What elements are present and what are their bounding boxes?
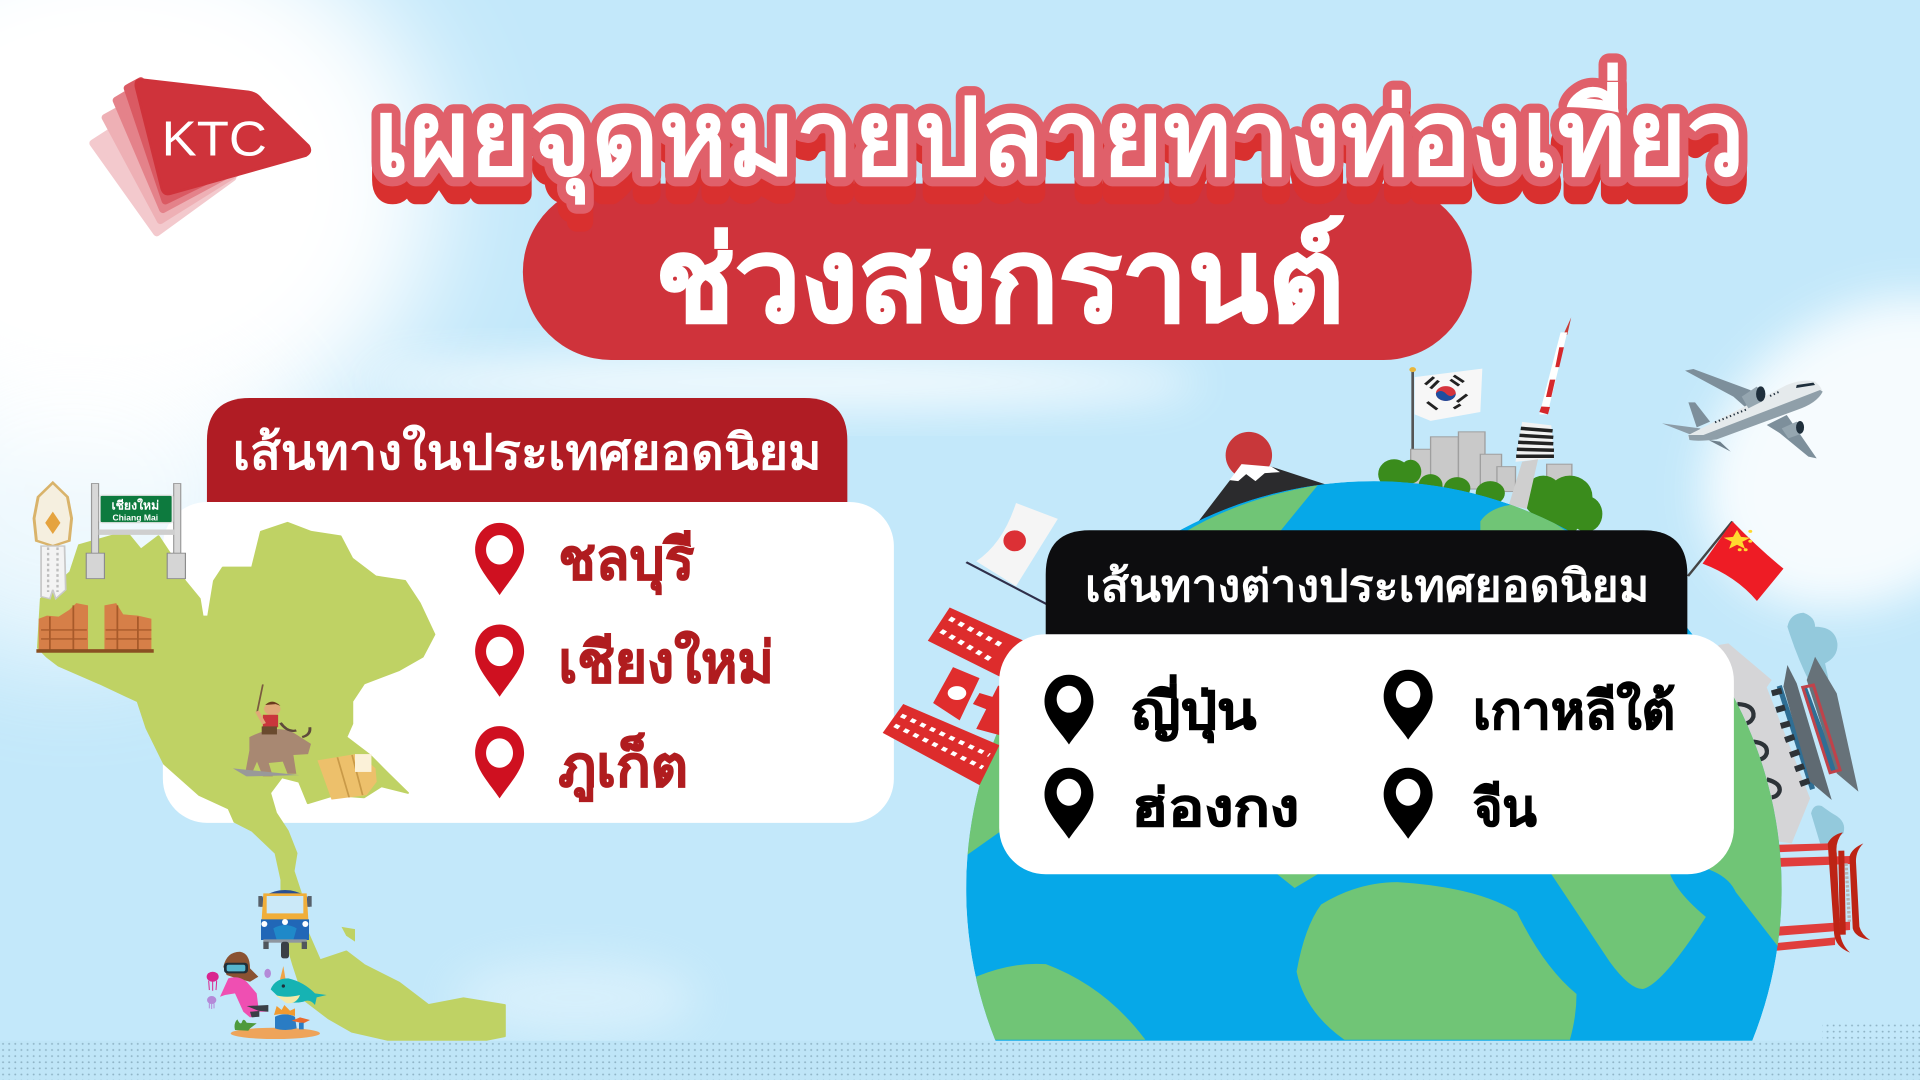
icon: clouds (1787, 613, 1844, 843)
globe (946, 481, 1809, 1041)
icon: jellyfish (207, 969, 271, 1009)
sign text (111, 497, 159, 522)
item: South Korea: เกาหลีใต้ (1473, 682, 1675, 740)
subtitle pill: ช่วงสงกรานต์ (655, 215, 1344, 346)
sign text: เชียงใหม่ (111, 497, 159, 512)
panel: domestic routes (163, 398, 894, 823)
icons behind globe: Fuji, Korean flag, buildings, tower, trees (1198, 317, 1602, 539)
item: Chonburi (475, 523, 694, 595)
icon: narwhal (271, 966, 327, 1005)
icon: wall arches (1737, 704, 1780, 797)
icon: torii gate (1767, 832, 1870, 953)
item: Phuket (475, 726, 688, 802)
icon: coral and sand (231, 1005, 320, 1039)
icon: city buildings (1411, 432, 1572, 492)
icon: Chiang Mai sign (86, 484, 185, 579)
icon: palace wall (1718, 643, 1810, 843)
icon: diver (220, 952, 268, 1017)
item: Hong Kong (1044, 768, 1299, 839)
icon: China flag (1688, 521, 1783, 601)
subtitle pill (523, 184, 1472, 360)
icon: Korean palace, clouds and torii gate (1718, 613, 1870, 953)
icon: golden tickets (317, 754, 377, 800)
icon: palace roofs (1772, 657, 1858, 800)
item: China: จีน (1473, 778, 1537, 836)
icon: Japan flag (966, 503, 1058, 604)
icon: airplane (1662, 369, 1823, 458)
icon: temple gates (36, 603, 154, 653)
icon: green trees (1378, 459, 1602, 539)
logo: KTC: KTC (162, 113, 267, 167)
item: South Korea (1384, 670, 1675, 740)
heading: domestic: เส้นทางในประเทศยอดนิยม (233, 424, 822, 480)
list: international destinations (1044, 670, 1675, 839)
icon: buffalo and boy (233, 684, 311, 776)
item: China (1384, 768, 1537, 839)
list: domestic destinations (475, 523, 774, 802)
icon: Seoul tower (1509, 317, 1571, 509)
icons: tuk tuk, diver, narwhal, coral (207, 890, 327, 1039)
map of Thailand with landmarks (34, 483, 505, 1040)
item: Japan: ญี่ปุ่น (1131, 675, 1256, 744)
item: Phuket: ภูเก็ต (558, 732, 688, 802)
logo: KTC (93, 79, 310, 233)
item: Chiang Mai: เชียงใหม่ (558, 630, 774, 694)
panel: international routes (999, 530, 1734, 874)
title with layered shadow: เผยจุดหมายปลายทางท่องเที่ยว (373, 62, 1745, 205)
icon: tuk tuk (258, 890, 312, 958)
icon: lantern (34, 483, 72, 599)
item: Hong Kong: ฮ่องกง (1131, 778, 1299, 836)
item: Chonburi: ชลบุรี (558, 528, 694, 595)
icon: Mount Fuji (1198, 464, 1328, 521)
item: Chiang Mai (475, 624, 774, 697)
sign text: Chiang Mai (112, 512, 158, 522)
item: Japan (1044, 675, 1256, 744)
icon: Hong Kong buildings (883, 607, 1029, 785)
icon: red sun (1226, 432, 1272, 479)
heading: international: เส้นทางต่างประเทศยอดนิยม (1085, 562, 1649, 611)
icon: Korean flag (1409, 367, 1482, 455)
title with layered shadow: เผยจุดหมายปลายทางท่องเที่ยว (373, 80, 1745, 223)
